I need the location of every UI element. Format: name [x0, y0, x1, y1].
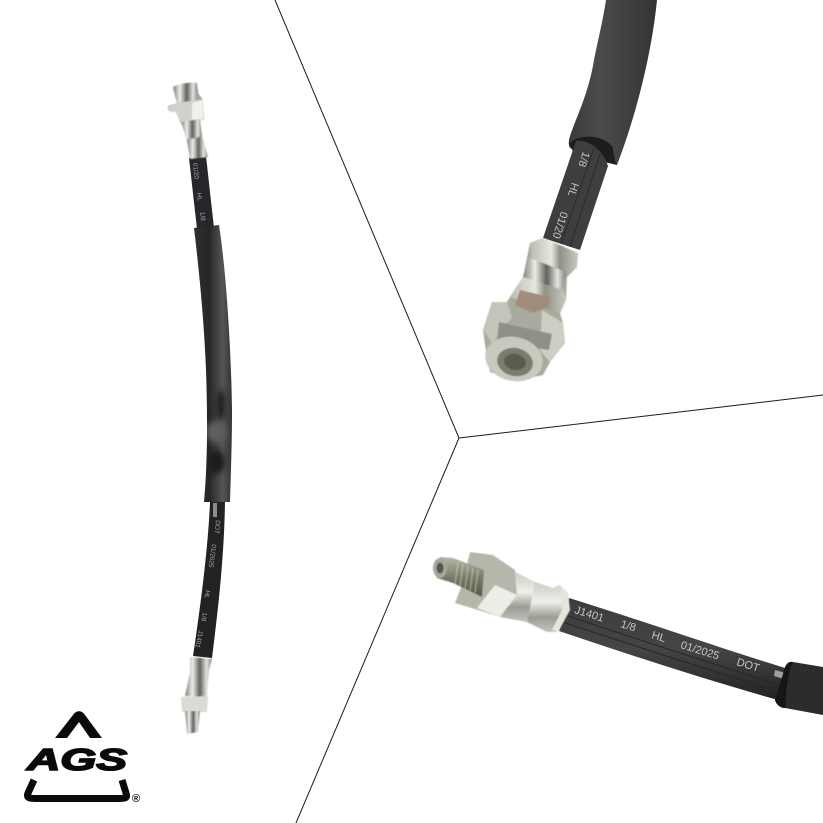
- logo: lower bracket: [28, 780, 127, 799]
- thread tip: [433, 558, 447, 578]
- logo: upper chevron: [55, 711, 102, 738]
- sleeve: [775, 662, 823, 715]
- thin hose: 01/20: [550, 210, 570, 240]
- protective sleeve: [194, 225, 232, 502]
- thin hose: HL: [650, 629, 667, 645]
- thin hose: [559, 598, 793, 700]
- cone: [500, 572, 535, 622]
- AGS logo: [26, 711, 140, 805]
- right clip tab: [540, 310, 565, 362]
- left clip tab: [483, 302, 512, 344]
- thin hose: DOT: [735, 656, 761, 675]
- upper thin hose: HL: [195, 192, 203, 202]
- lower thin hose: HL: [203, 590, 211, 599]
- fitting silhouette: [483, 238, 578, 381]
- fitting: [481, 238, 578, 387]
- upper thin hose: [189, 156, 214, 229]
- lower thin hose: DOT: [213, 520, 221, 534]
- logo: wordmark: AGS: [26, 742, 127, 777]
- threaded bore: [481, 331, 547, 387]
- bright nut face: [477, 585, 517, 617]
- top fitting: [168, 83, 208, 159]
- collar: [527, 582, 570, 632]
- thin hose: 01/2025: [679, 639, 721, 662]
- lower thin hose: 01/2025: [207, 544, 217, 568]
- thin hose: J1401: [573, 604, 605, 625]
- sleeve opening: [569, 137, 617, 165]
- thread: [433, 557, 484, 597]
- full hose, left panel: [168, 83, 232, 734]
- divider lines: [275, 0, 823, 823]
- upper thin hose: 1/8: [198, 211, 206, 222]
- lower thin hose: J1401: [193, 630, 204, 649]
- brown hex nut: [515, 290, 550, 313]
- thin hose: 1/8: [575, 150, 592, 168]
- nut: [455, 552, 517, 617]
- thin hose: [543, 141, 608, 250]
- thin hose: 1/8: [619, 618, 637, 634]
- fitting: [433, 552, 570, 632]
- ring: [497, 322, 552, 350]
- detail: bottom right hose end: [433, 552, 823, 715]
- upper thin hose: 01/20: [191, 162, 200, 180]
- thin hose: HL: [565, 181, 581, 198]
- detail: top right hose end: [481, 0, 657, 387]
- logo: registered mark: ®: [132, 793, 140, 805]
- bottom fitting: [181, 657, 212, 734]
- lower thin hose: 1/8: [199, 612, 208, 622]
- lower thin hose: [193, 502, 225, 658]
- sleeve: [569, 0, 657, 165]
